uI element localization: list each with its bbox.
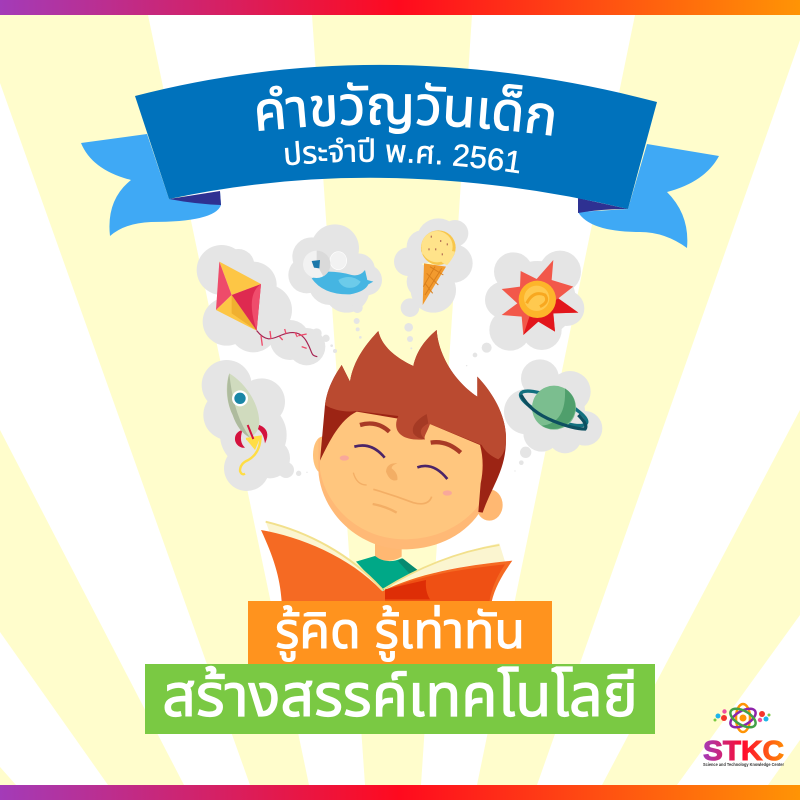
icon: ice cream in cloud	[394, 218, 473, 349]
open book	[261, 522, 512, 602]
banner subtitle: ประจำปี พ.ศ. 2561	[284, 137, 520, 174]
icon: sun in cloud	[466, 251, 584, 366]
slogan box: orange	[248, 601, 552, 664]
thought bubbles and icons	[197, 218, 602, 491]
boy: smile	[353, 473, 432, 513]
icon: ringed planet in cloud	[504, 359, 602, 472]
banner ribbon	[81, 64, 719, 248]
right ribbon tail	[578, 144, 719, 248]
boy: shirt	[356, 556, 418, 591]
boy: hair	[320, 330, 506, 513]
boy: neck	[375, 543, 402, 561]
icon: bird in cloud	[288, 224, 382, 339]
slogan box: green	[145, 663, 655, 734]
boy reading a book	[261, 330, 512, 602]
logo: wordmark: STKC	[703, 735, 784, 766]
slogan line 2: สร้างสรรค์เทคโนโลยี	[162, 663, 638, 729]
logo: tagline: Science and Technology Knowledge Center	[703, 762, 784, 767]
logo: atom	[714, 704, 770, 732]
banner title: คำขวัญวันเด็ก	[257, 82, 554, 136]
boy: face	[318, 410, 485, 549]
left ribbon tail	[81, 134, 221, 236]
boy: nose	[386, 463, 397, 481]
right ribbon fold	[578, 198, 628, 213]
boy: cheeks	[340, 455, 452, 496]
main ribbon	[135, 65, 657, 209]
bottom gradient bar	[0, 785, 800, 800]
icon: kite in cloud	[197, 245, 337, 365]
boy: eyebrows	[360, 423, 461, 453]
slogan line 1: รู้คิด รู้เท่าทัน	[275, 603, 525, 661]
top gradient bar	[0, 0, 800, 15]
boy: eyes	[354, 445, 447, 479]
left ribbon fold	[169, 191, 221, 205]
boy: ears	[313, 437, 503, 521]
STKC logo	[703, 704, 784, 767]
icon: rocket in cloud	[202, 360, 308, 491]
